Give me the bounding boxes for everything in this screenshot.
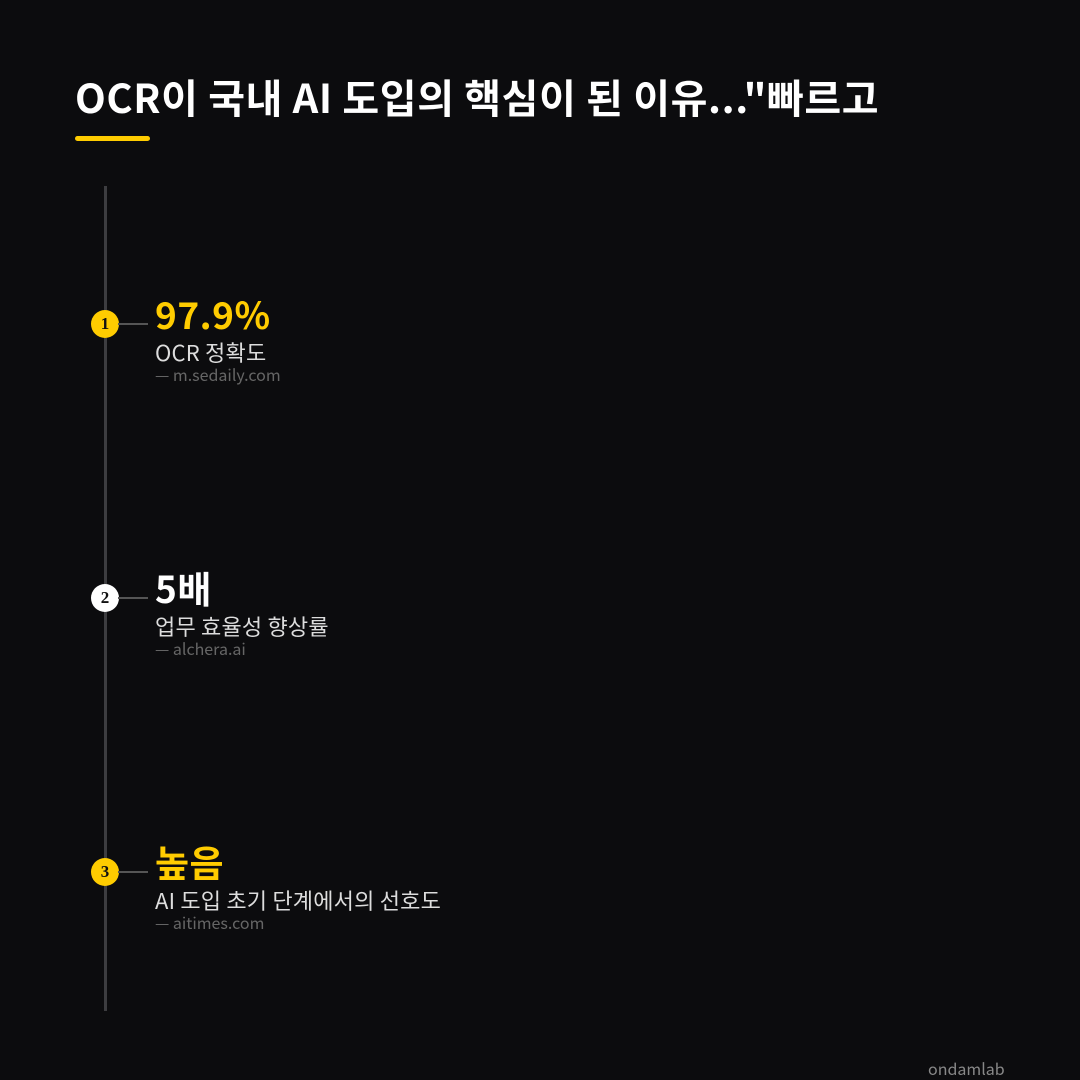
value 1: 97.9% [155, 286, 271, 340]
item 2 [91, 560, 329, 660]
label 2: 업무 효율성 향상률 [155, 610, 329, 642]
item 3 [91, 834, 441, 934]
label 1: OCR 정확도 [155, 336, 266, 368]
source 3: — aitimes.com [155, 910, 264, 934]
footer brand: ondamlab [928, 1056, 1005, 1080]
marker 2: 2 [101, 588, 109, 607]
title underline [75, 136, 150, 141]
value 2: 5배 [155, 560, 212, 614]
marker 3 [91, 858, 119, 886]
timeline line [104, 186, 107, 1011]
title: OCR이 국내 AI 도입의 핵심이 된 이유..."빠르고 [75, 67, 879, 125]
marker 1: 1 [101, 314, 109, 333]
label 3: AI 도입 초기 단계에서의 선호도 [155, 884, 441, 916]
marker 2 [91, 584, 119, 612]
value 3: 높음 [155, 834, 224, 888]
source 2: — alchera.ai [155, 636, 246, 660]
marker 1 [91, 310, 119, 338]
item 1 [91, 286, 281, 386]
source 1: — m.sedaily.com [155, 362, 281, 386]
marker 3: 3 [101, 862, 109, 881]
